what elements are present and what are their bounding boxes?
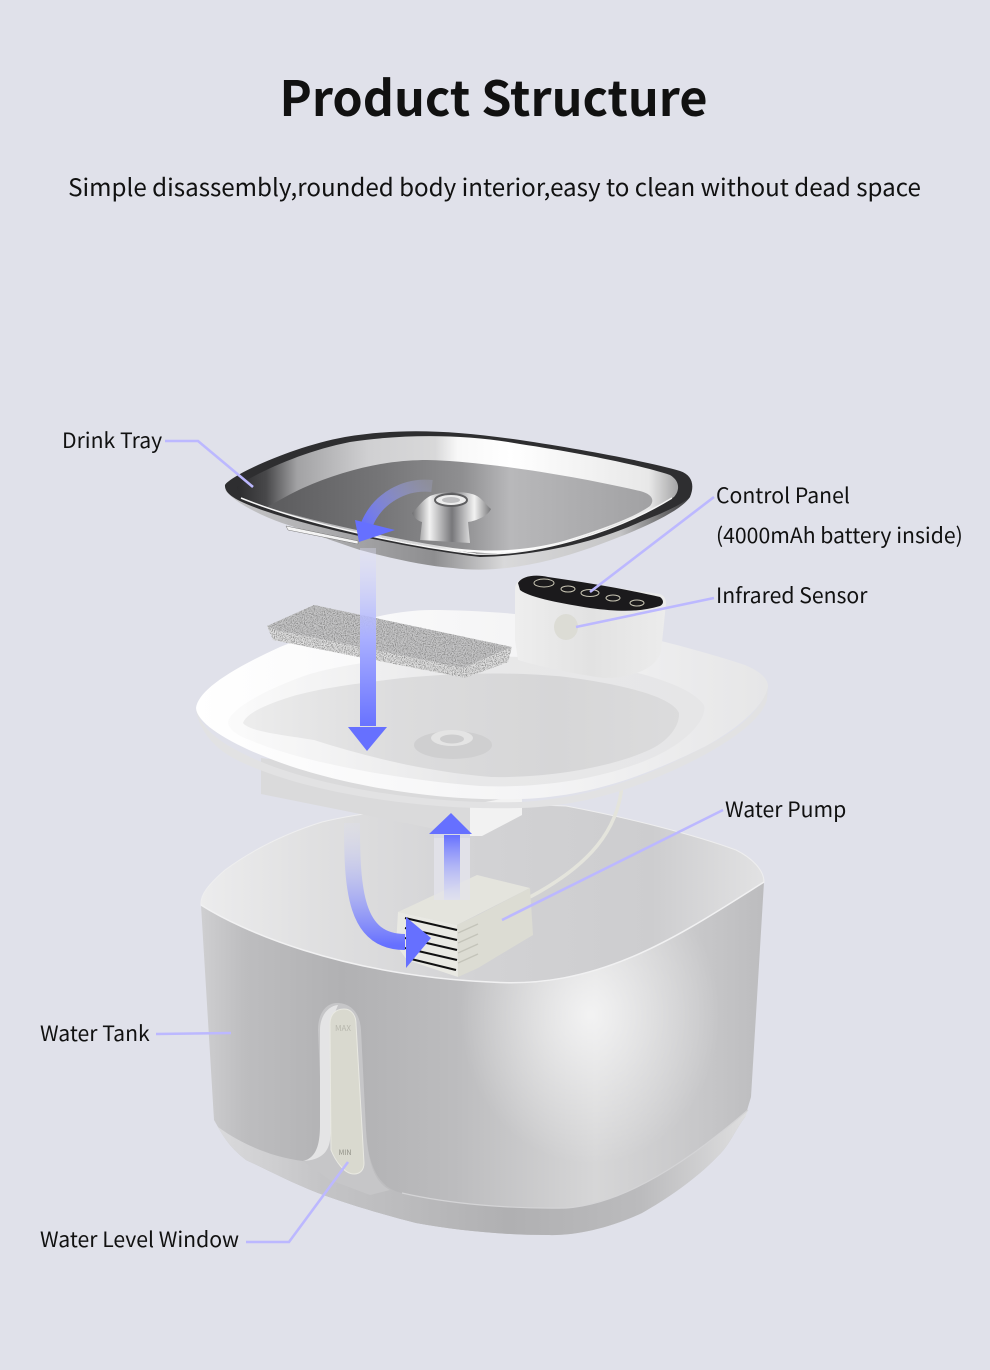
water tank <box>201 805 770 1235</box>
tray bowl <box>267 460 652 551</box>
groove around water level window <box>303 1003 390 1195</box>
stainless steel drink tray <box>225 431 692 570</box>
tray outer rim <box>225 431 692 557</box>
label: Drink Tray <box>62 424 253 487</box>
label: Infrared Sensor: Infrared Sensor <box>716 579 868 610</box>
arrow: water flows to pump intake <box>352 823 431 968</box>
touch buttons <box>534 579 644 606</box>
filter sponge <box>267 605 512 678</box>
tank interior <box>201 805 764 983</box>
intake slots <box>405 918 457 970</box>
pump side <box>457 888 533 977</box>
spout cap <box>412 492 491 543</box>
reservoir box <box>261 758 522 836</box>
tray rim slope <box>237 436 678 553</box>
title: Product Structure <box>279 60 708 130</box>
tray inner ledge <box>228 656 704 786</box>
pump intake face <box>396 912 458 977</box>
pump outlet stem <box>434 838 470 900</box>
panel edge highlight <box>402 1110 748 1208</box>
arrow: water flows up <box>429 813 472 900</box>
water level window <box>330 1009 364 1174</box>
label: Water Level Window: Water Level Window <box>40 1223 239 1254</box>
tray lip <box>196 685 768 808</box>
label: Control Panel: (4000mAh battery inside) <box>716 519 963 550</box>
arrow: swirl around spout <box>355 486 432 542</box>
subtitle: Simple disassembly,rounded body interior,easy to clean without dead space <box>68 168 921 203</box>
touch panel <box>518 576 663 611</box>
tank front rim highlight <box>201 882 764 983</box>
tray slot <box>286 526 358 544</box>
tank outer body <box>201 882 764 1235</box>
spout seat <box>414 730 492 759</box>
arrow: water flows down <box>348 548 387 751</box>
label: Infrared Sensor <box>576 579 868 627</box>
drink tray base / reservoir <box>196 610 768 902</box>
tank highlight <box>487 943 690 1121</box>
tray front lip highlight <box>241 498 672 554</box>
label: Water Pump <box>502 793 846 920</box>
label: Water Tank: Water Tank <box>40 1017 150 1048</box>
label: Water Level Window <box>40 1162 348 1254</box>
pump top <box>398 875 530 925</box>
label: Control Panel: Control Panel <box>716 479 850 510</box>
tube <box>530 785 622 897</box>
side fins <box>458 924 478 963</box>
module body <box>515 576 666 678</box>
pipe behind pump <box>434 832 470 902</box>
tray underside <box>225 490 690 570</box>
tank base band <box>218 1110 748 1235</box>
label: Water Pump: Water Pump <box>725 793 846 824</box>
water pump <box>396 838 533 977</box>
MAX mark: MAX <box>335 1023 351 1034</box>
MIN mark: MIN <box>339 1148 351 1158</box>
label: Control Panel <box>590 479 963 592</box>
control panel module <box>515 576 666 678</box>
outer tray <box>196 610 768 799</box>
infrared sensor <box>554 614 578 640</box>
inner basin <box>243 674 679 777</box>
label: Drink Tray: Drink Tray <box>62 424 162 455</box>
